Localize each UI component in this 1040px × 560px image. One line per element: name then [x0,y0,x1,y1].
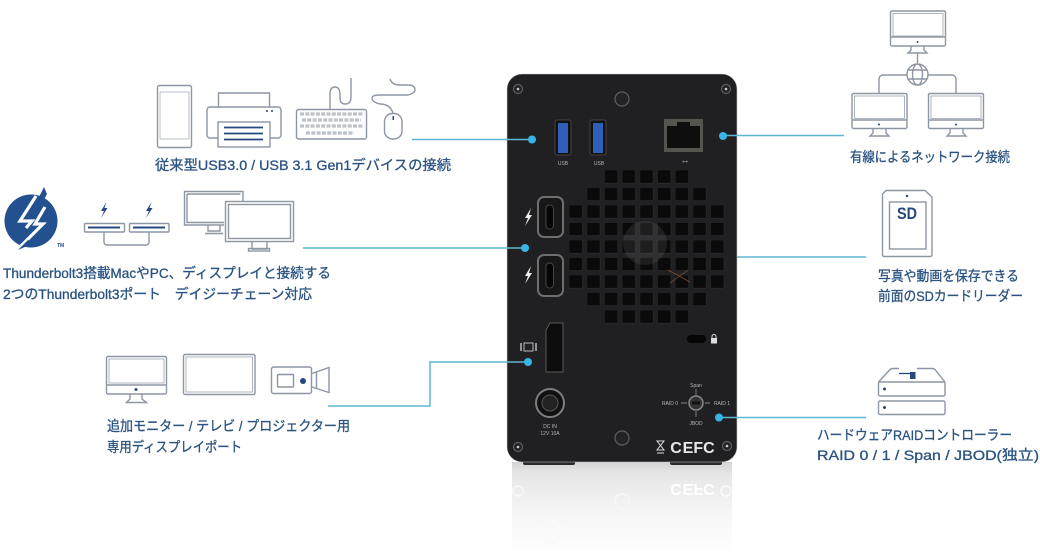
USB ports: USB [594,161,605,167]
feet [523,460,722,465]
panel: display outputs [106,354,350,455]
text: USB caption: 従来型USB3.0 / USB 3.1 Gen1デバイスの接続 [155,157,451,173]
fan grille [569,170,728,328]
RAID switch [662,383,730,427]
RAID switch: RAID 0 [662,401,678,407]
text: RAID caption [817,427,1039,463]
text: Thunderbolt caption: 2つのThunderbolt3ポート デイジーチェーン対応 [3,286,312,302]
RAID switch: JBOD [689,421,703,427]
panel: Thunderbolt [3,187,331,302]
DC power input: 12V 10A [540,431,560,437]
text: Thunderbolt caption [3,265,331,302]
text: RAID caption: ハードウェアRAIDコントローラー [817,427,1012,443]
device rear panel [507,74,737,465]
icon: daisy-chained ports [84,202,169,245]
Thunderbolt ports [525,197,563,296]
DC power input [536,389,564,437]
panel: SD card [878,190,1023,304]
DC power input: DC IN [543,424,557,430]
panel: RAID [817,366,1039,463]
ethernet port [664,119,703,165]
security lock slot [687,334,717,344]
RAID switch: Span [690,383,702,389]
icon: keyboard [296,78,366,139]
text: display caption [107,418,350,455]
icon: video camera [272,367,329,394]
text: display caption: 追加モニター / テレビ / プロジェクター用 [107,418,350,434]
text: SD caption: 写真や動画を保存できる [878,268,1019,284]
icon: desktop monitor [106,356,166,402]
certification marks [657,440,715,457]
screws [514,84,732,452]
text: SD caption: 前面のSDカードリーダー [878,288,1023,304]
icon: SD card: SD [897,204,917,223]
device reflection: E [683,480,694,497]
certification marks: FC [693,440,715,457]
icon: Thunderbolt logo [4,187,64,250]
DisplayPort [521,323,563,372]
USB ports [555,120,606,167]
ethernet port: ↔ [680,155,690,165]
text: RAID caption: RAID 0 / 1 / Span / JBOD(独立) [817,447,1039,463]
USB ports: USB [558,161,569,167]
device reflection [512,462,732,557]
icon: network of computers [852,11,984,136]
text: SD caption [878,268,1023,304]
text: Thunderbolt caption: Thunderbolt3搭載MacやPC、ディスプレイと接続する [3,265,331,281]
certification marks: C [670,440,682,457]
device reflection: FC [693,480,715,497]
panel: USB devices [155,78,451,173]
connector lines [303,132,866,422]
device reflection: C [670,480,682,497]
panel: network [850,11,1010,165]
icon: TV [184,354,255,394]
icon: smartphone [158,86,192,148]
icon: SD card [882,190,932,256]
RAID switch: RAID 1 [714,401,730,407]
icon: mouse [372,79,415,139]
certification marks: E [683,440,694,457]
device body [507,74,737,462]
icon: printer [207,93,281,147]
icon: RAID drives [878,366,945,414]
icon: two monitors [184,192,294,251]
icon: Thunderbolt logo: TM [57,243,64,249]
text: display caption: 専用ディスプレイポート [107,439,242,455]
text: network caption: 有線によるネットワーク接続 [850,149,1010,165]
